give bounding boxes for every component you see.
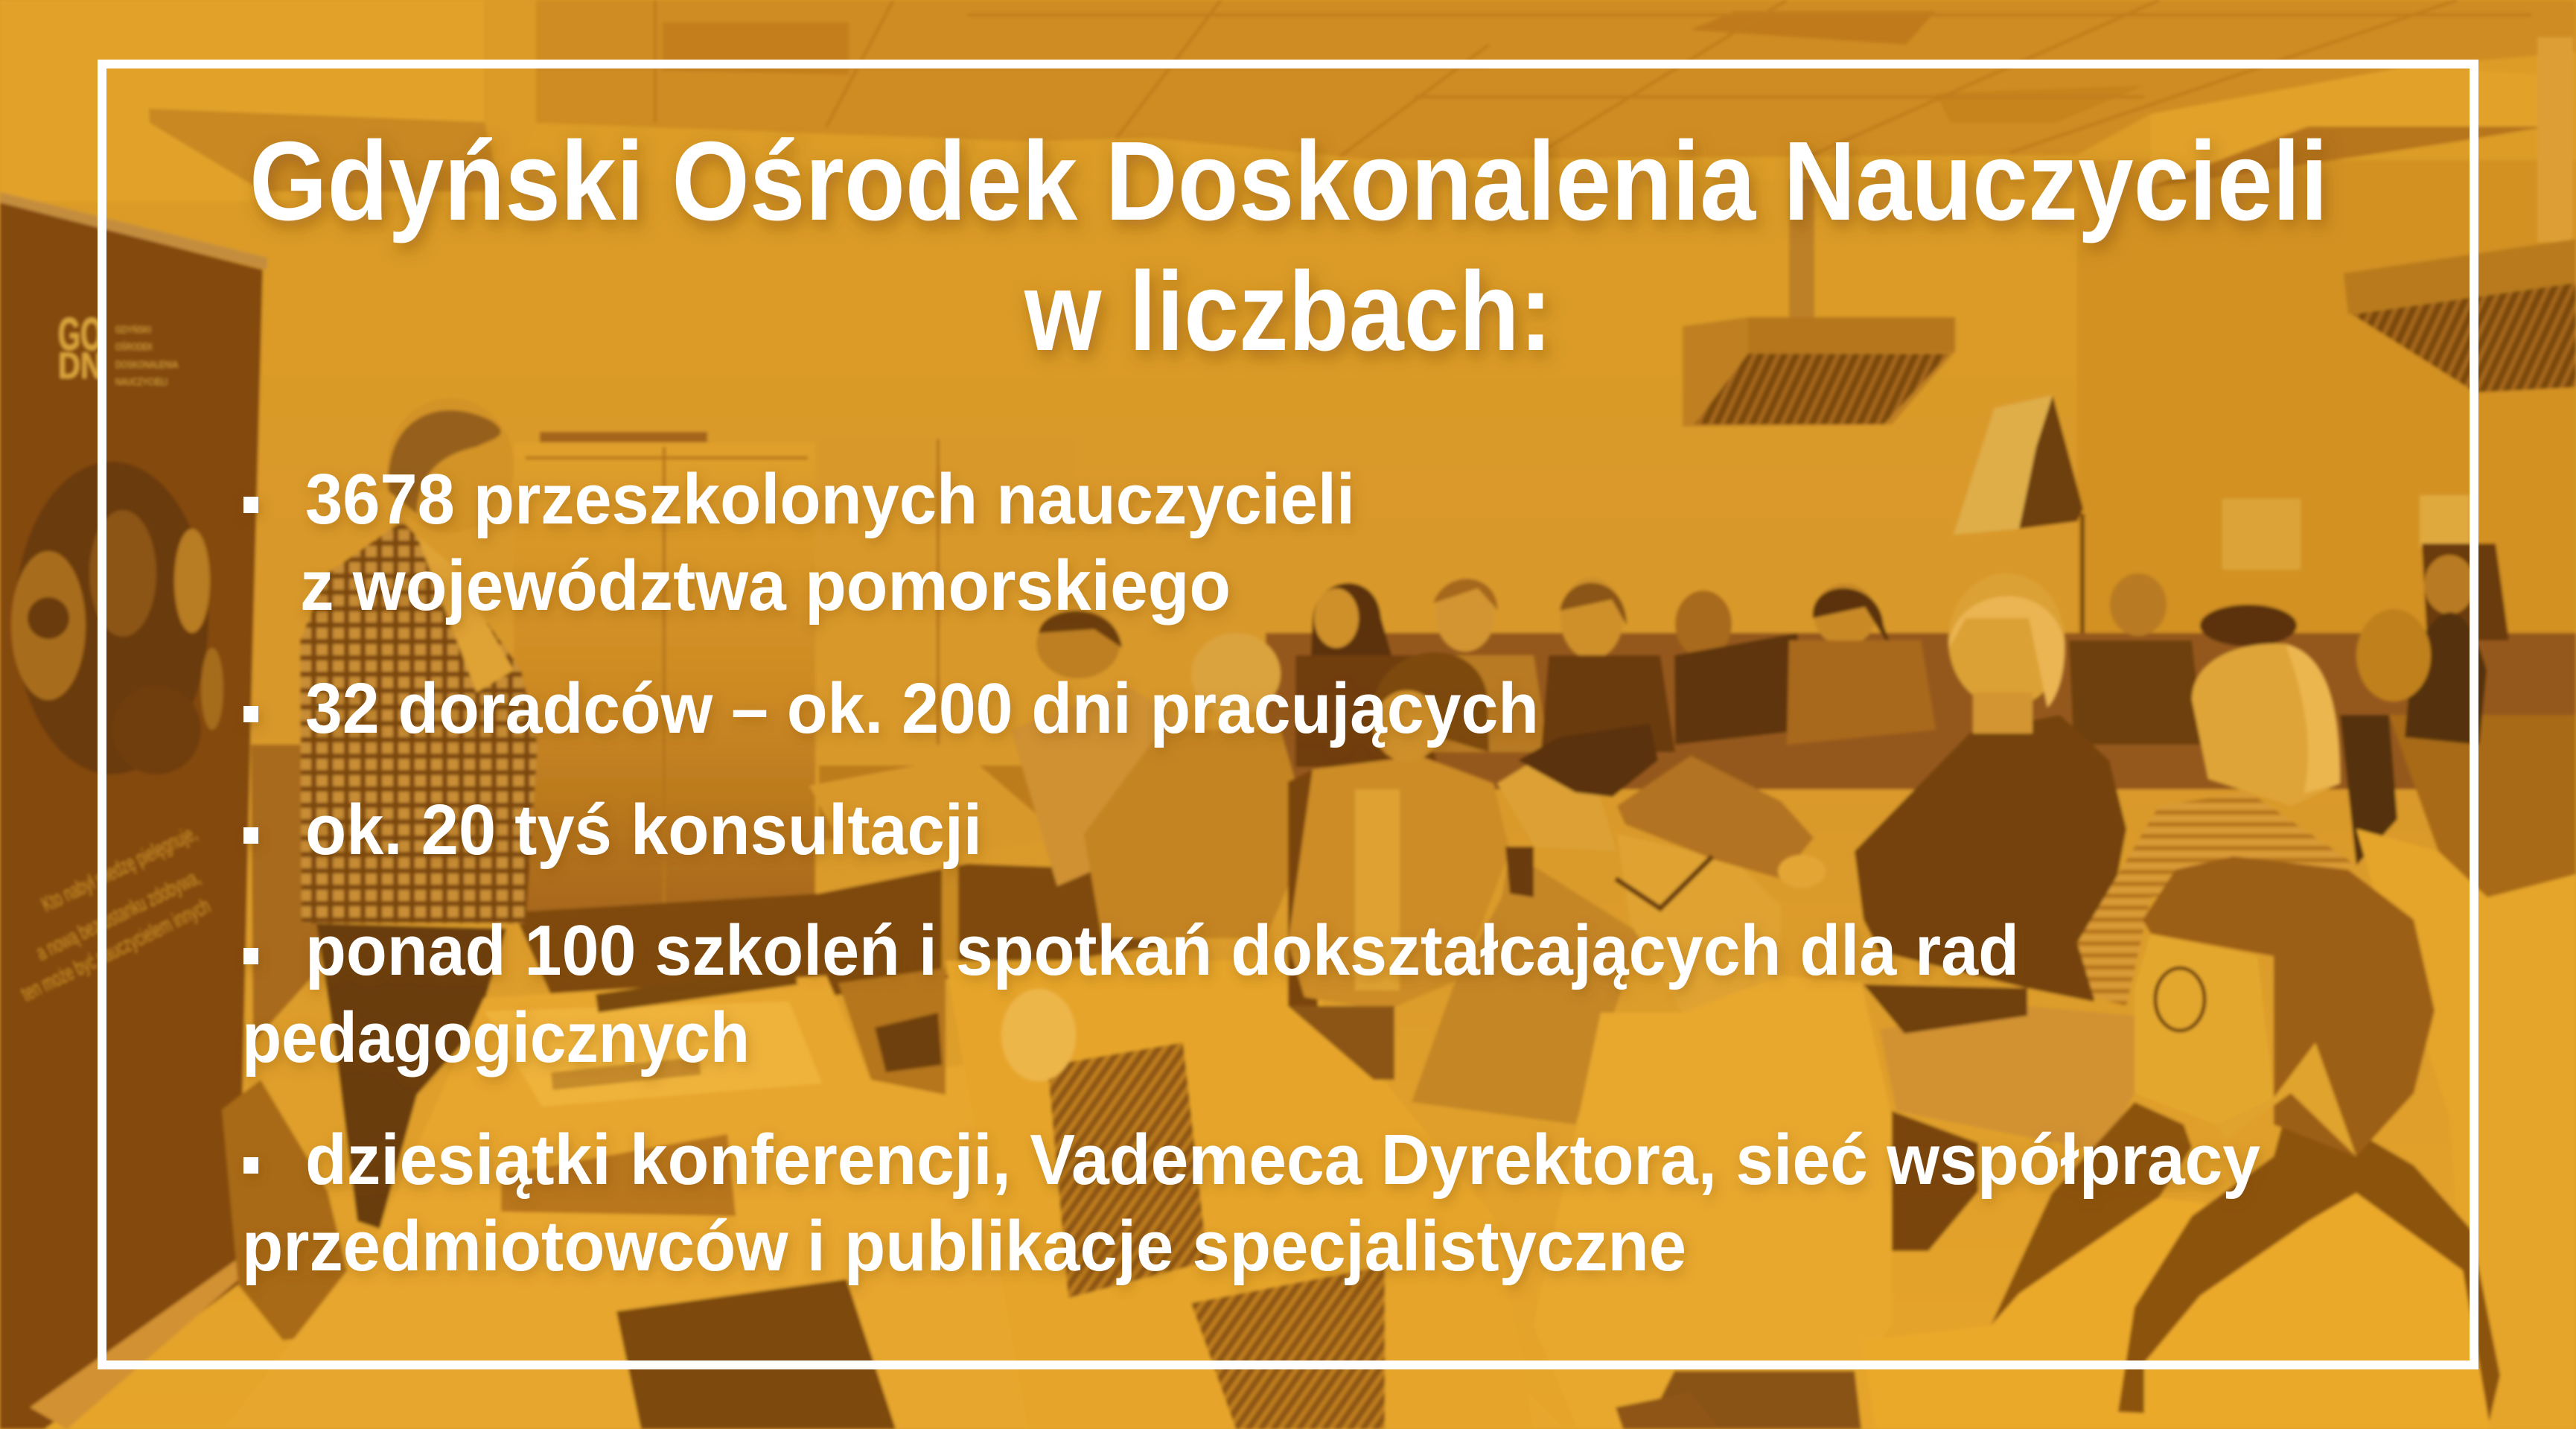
audio mixer — [616, 1279, 896, 1429]
table gap with shoes — [838, 968, 946, 1095]
item: trained teachers: 3678 przeszkolonych nauczycieli — [305, 459, 1355, 539]
woman with dark hair — [1497, 724, 1658, 897]
back row counter — [1266, 633, 2576, 789]
table with bag — [1864, 984, 2135, 1251]
right wall panel — [2077, 160, 2576, 637]
title — [249, 118, 2328, 374]
paper on table — [485, 1002, 822, 1107]
item: trainings: ponad 100 szkoleń i spotkań dokształcających dla rad — [305, 911, 2019, 990]
man with white hair in dark jacket — [1855, 573, 2126, 1002]
banner — [0, 192, 267, 1429]
cabinets — [514, 438, 1077, 912]
banner logo: NAUCZYCIELI — [115, 376, 168, 387]
woman at far right — [2356, 609, 2576, 1429]
ceiling with tiles — [484, 0, 2576, 159]
notepads on the table — [596, 966, 797, 1013]
ceiling box right — [2151, 67, 2539, 186]
dark gap beside cardigan — [1288, 767, 1318, 1006]
back table — [809, 756, 1064, 870]
woman with brown hair in cardigan — [1288, 652, 1510, 1011]
statistics list — [242, 459, 2260, 1286]
dark gap beside striped woman — [2340, 715, 2397, 865]
woman B blond cardigan — [1084, 633, 1310, 938]
blonde woman with glasses in sweater — [1534, 756, 1892, 1429]
dark floor zone beneath cabinets — [514, 864, 1161, 1028]
right duct — [2537, 37, 2573, 242]
item: trainings: pedagogicznych — [242, 998, 750, 1078]
speaker — [300, 398, 538, 1229]
banner logo — [58, 309, 178, 387]
item: trainings — [242, 911, 2019, 1078]
item: trained teachers: z województwa pomorskiego — [300, 546, 1231, 626]
chair — [222, 1080, 361, 1340]
banner circle pattern — [11, 462, 223, 774]
brown panel on table — [501, 1134, 736, 1216]
dark gap below cardigan — [1288, 1006, 1394, 1080]
striped box 2 — [1191, 1266, 1385, 1429]
banner slogan: Kto nabył wiedzę pielęgnuje, — [38, 821, 201, 917]
banner slogan: ten może być nauczycielem innych — [18, 894, 214, 1006]
item: advisers: 32 doradców – ok. 200 dni pracujących — [305, 669, 1539, 748]
title: Gdyński Ośrodek Doskonalenia Nauczycieli — [249, 118, 2328, 244]
item: conferences — [242, 1120, 2260, 1286]
banner slogan: a nową bez ustanku zdobywa, — [33, 865, 205, 965]
dark area lower centre — [1645, 1371, 1861, 1429]
banner logo: GO — [58, 309, 103, 360]
printed shirt of woman with dark hair — [1412, 851, 1641, 1124]
phone on desk — [1616, 1393, 1720, 1429]
banner logo: OŚRODEK — [115, 341, 153, 352]
hood right — [2344, 239, 2576, 392]
banner slogan — [18, 821, 214, 1006]
tan stack beside banner — [251, 745, 320, 1043]
front woman in vest — [1861, 856, 2500, 1429]
striped box 1 — [1048, 1043, 1208, 1298]
duct centre — [1789, 179, 1814, 320]
wall posters — [2222, 499, 2301, 570]
banner logo: GDYŃSKI — [115, 324, 151, 335]
item: trained teachers — [243, 459, 1355, 626]
item: conferences: dziesiątki konferencji, Vademeca Dyrektora, sieć współpracy — [305, 1120, 2260, 1200]
softbox lamp — [1954, 395, 2085, 693]
wall soffit left — [149, 109, 501, 191]
blonde woman with stripes — [2077, 643, 2356, 1006]
item: consultations: ok. 20 tyś konsultacji — [305, 790, 982, 870]
items on the cabinet — [540, 432, 707, 442]
title: w liczbach: — [1024, 248, 1552, 374]
banner logo: DN — [58, 345, 103, 386]
banner logo: DOSKONALENIA — [115, 359, 178, 370]
left column — [0, 0, 484, 201]
hood centre — [1683, 317, 1955, 427]
foreground tables — [223, 961, 1563, 1429]
item: conferences: przedmiotowców i publikacje specjalistyczne — [242, 1206, 1686, 1286]
woman A at table — [1011, 610, 1176, 886]
mug — [1001, 989, 1076, 1081]
back row people — [1295, 544, 2509, 767]
